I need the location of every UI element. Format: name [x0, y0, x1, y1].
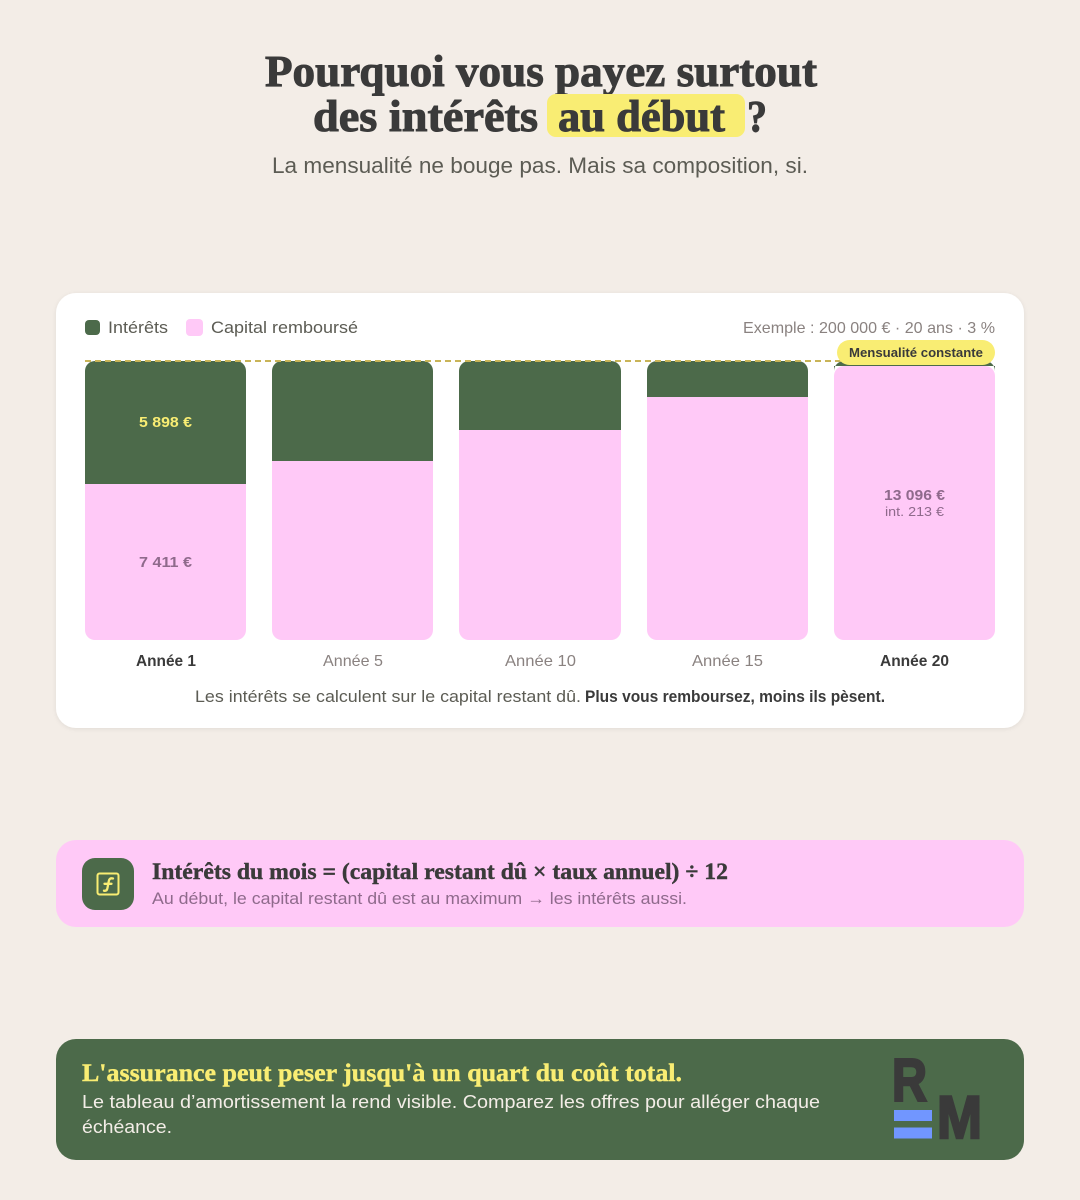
- subtitle: La mensualité ne bouge pas. Mais sa composition, si.: [272, 153, 808, 178]
- example note: Exemple : 200 000 € · 20 ans · 3 %: [743, 320, 995, 337]
- bar: année 1: 7 411 €: [139, 555, 192, 571]
- title: ?: [747, 92, 767, 141]
- icon: function: [82, 858, 134, 910]
- bar labels: [136, 653, 949, 670]
- logo: RM: [892, 1047, 982, 1151]
- bar labels: Année 15: [692, 653, 763, 670]
- legend: Capital remboursé: [211, 319, 358, 337]
- takeaway body: Le tableau d’amortissement la rend visible. Comparez les offres pour alléger chaque: [82, 1091, 820, 1112]
- panel: formula: [56, 840, 1024, 927]
- bar: année 20: [834, 361, 995, 640]
- takeaway body: échéance.: [82, 1116, 172, 1137]
- badge: mensualité constante: Mensualité constante: [849, 345, 983, 360]
- bar: année 1: 5 898 €: [139, 415, 192, 431]
- formula text: Intérêts du mois = (capital restant dû × taux annuel) ÷ 12: [152, 859, 728, 884]
- chart caption: Les intérêts se calculent sur le capital restant dû.: [195, 688, 581, 706]
- formula explanation: Au début, le capital restant dû est au maximum → les intérêts aussi.: [152, 890, 687, 908]
- title: des intérêts: [313, 92, 538, 141]
- logo: RM: M: [937, 1084, 982, 1151]
- title: Pourquoi vous payez surtout: [265, 47, 817, 96]
- badge: mensualité constante: [837, 340, 995, 365]
- bar: année 5: [272, 361, 433, 640]
- bar labels: Année 20: [880, 653, 949, 670]
- chart caption: [195, 688, 885, 706]
- takeaway body: [82, 1091, 820, 1137]
- bar labels: Année 5: [323, 653, 383, 670]
- bar labels: Année 1: [136, 653, 196, 670]
- bar: année 1: [85, 361, 246, 640]
- logo: RM: R: [892, 1047, 927, 1114]
- legend: Intérêts: [108, 319, 168, 337]
- bar: année 10: [459, 361, 621, 640]
- constant payment dashed line: [85, 360, 995, 362]
- chart caption: Plus vous remboursez, moins ils pèsent.: [585, 688, 885, 706]
- bar: année 20: 13 096 €: [884, 488, 945, 504]
- panel: insurance takeaway: [56, 1039, 1024, 1160]
- legend: [85, 319, 358, 337]
- bar labels: Année 10: [505, 653, 576, 670]
- title: [265, 47, 817, 141]
- bar: année 20: int. 213 €: [885, 504, 945, 519]
- title highlight: au début: au début: [558, 92, 725, 141]
- takeaway heading: L'assurance peut peser jusqu'à un quart du coût total.: [82, 1060, 682, 1087]
- bar: année 15: [647, 361, 808, 640]
- panel: chart card: [56, 293, 1024, 728]
